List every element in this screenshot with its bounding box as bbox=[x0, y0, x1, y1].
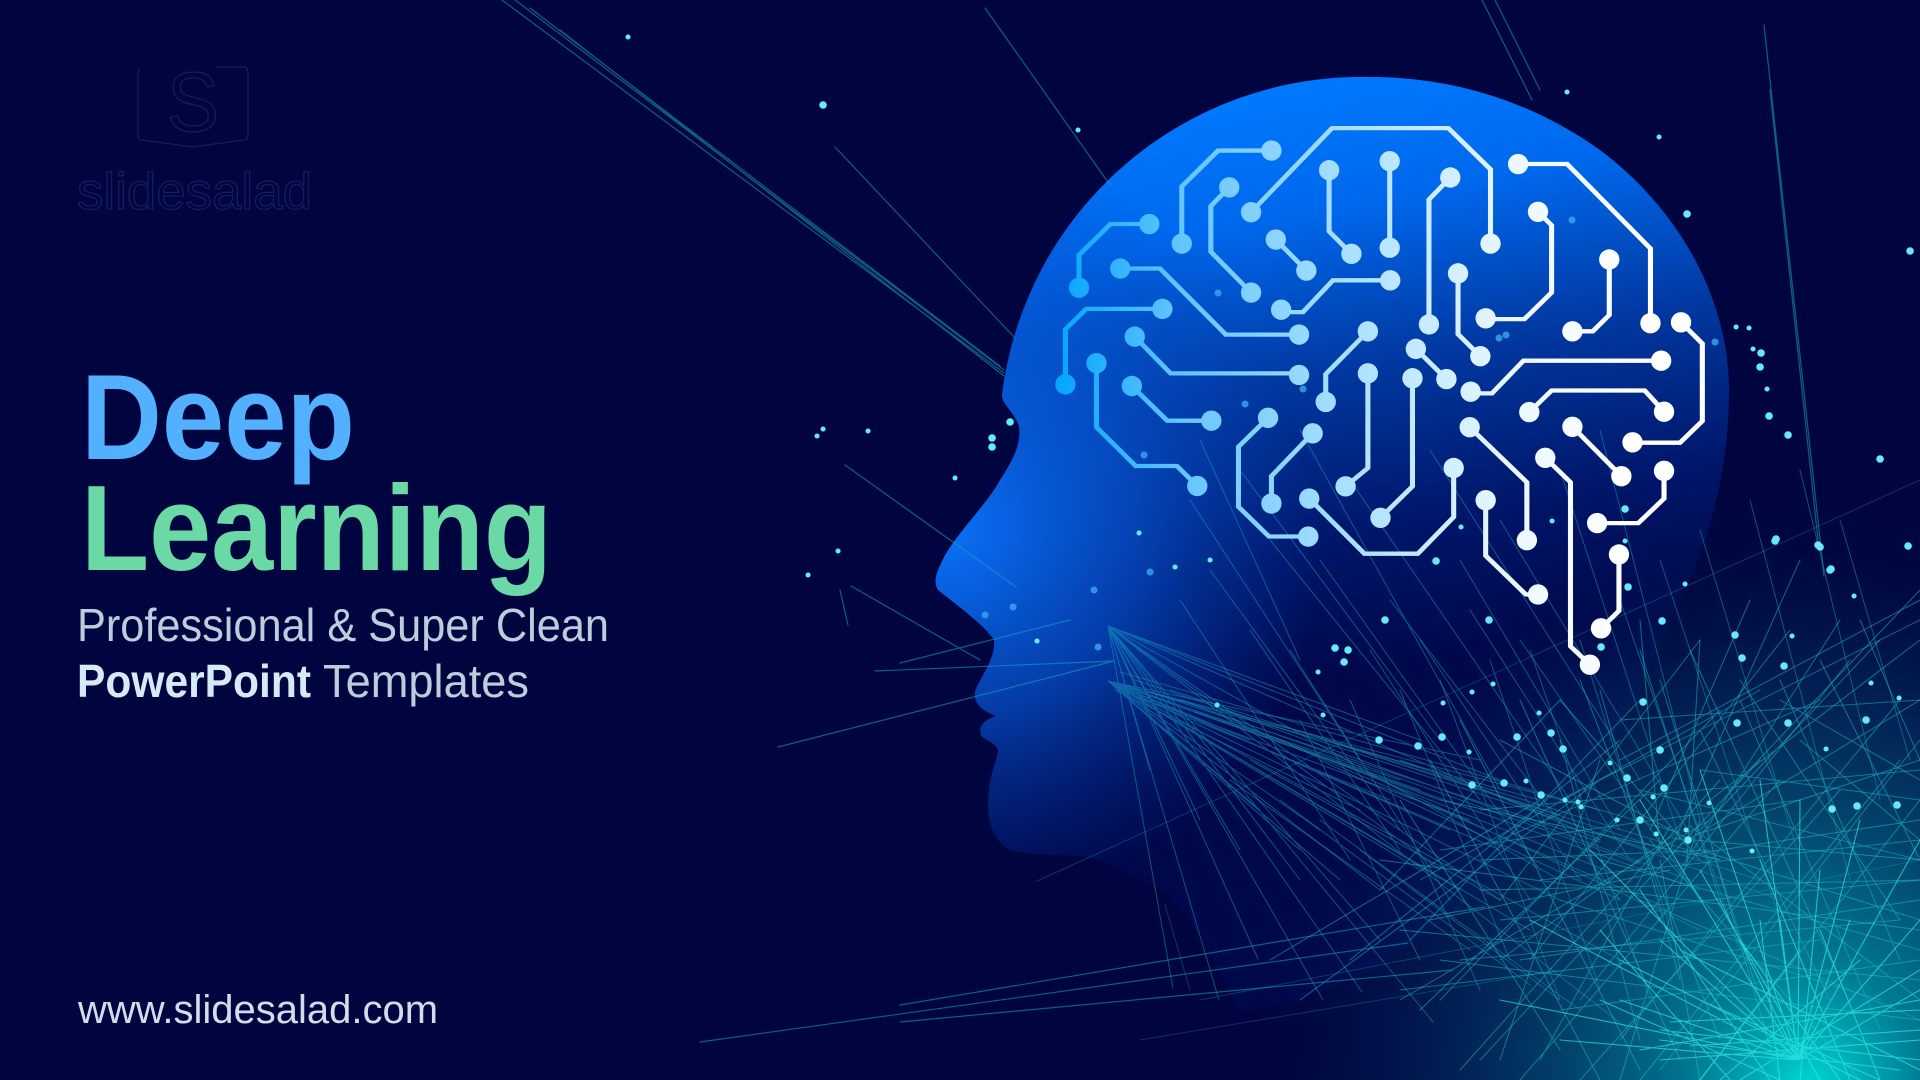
subtitle line 1: Professional & Super Clean bbox=[77, 599, 609, 651]
glow: bottom right bbox=[1200, 460, 1920, 1080]
subtitle bbox=[77, 599, 609, 707]
particles bbox=[628, 37, 1910, 851]
network lines bbox=[502, 0, 1920, 1080]
subtitle line 2 bold: PowerPoint bbox=[77, 655, 311, 707]
subtitle line 2 regular: Templates bbox=[323, 655, 529, 707]
brain circuit bbox=[1055, 128, 1702, 675]
title line 1: Deep bbox=[81, 349, 355, 485]
logo wordmark: slidesalad bbox=[77, 163, 312, 221]
circuit traces bbox=[1065, 128, 1702, 665]
title line 2: Learning bbox=[81, 460, 552, 596]
website url: www.slidesalad.com bbox=[77, 988, 438, 1032]
logo mark: S bbox=[167, 55, 219, 149]
circuit nodes bbox=[1055, 140, 1691, 675]
head silhouette bbox=[936, 77, 1729, 1010]
logo mark bbox=[138, 55, 248, 149]
title: Deep Learning bbox=[81, 349, 552, 596]
logo: slidesalad watermark bbox=[77, 55, 312, 221]
